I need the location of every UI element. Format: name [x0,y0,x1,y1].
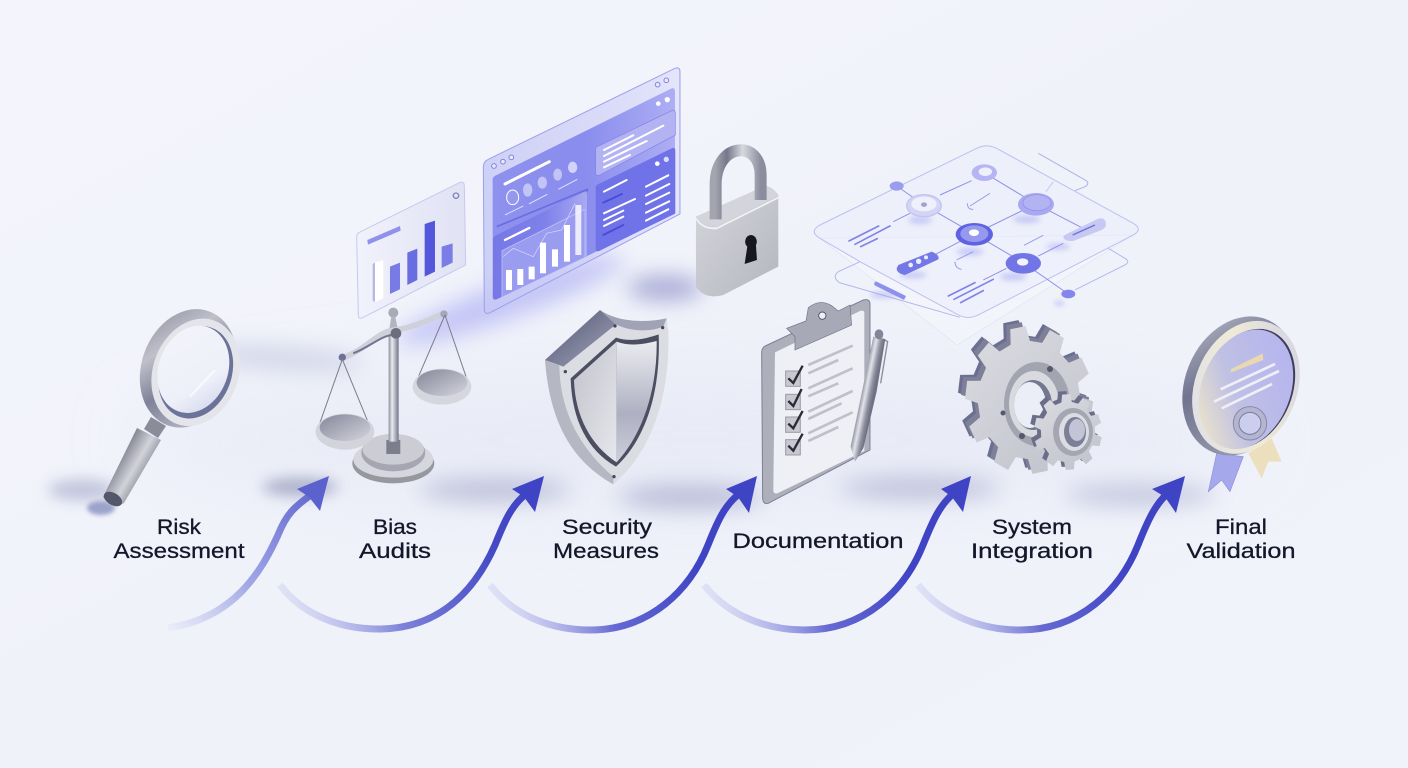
label: System Integration: System [992,516,1072,539]
label: Documentation: Documentation [732,530,904,553]
label: Final Validation: Validation [1186,540,1296,563]
large gear [950,312,1101,482]
label: Risk Assessment: Assessment [114,540,245,563]
node shadows [870,215,1070,306]
metric circles cell [497,162,587,227]
text cell bottom right [596,148,675,251]
window dots [492,78,669,168]
icon: balance scale [316,308,471,483]
panel: workflow network diagram [814,146,1138,345]
label: Security Measures: Measures [553,540,659,563]
arrow: Security Measures to Documentation [490,476,757,630]
label: System Integration: Integration [971,540,1093,563]
label: Risk Assessment: Risk [157,516,202,539]
arrow: Documentation to System Integration [704,476,971,630]
text lines [849,226,993,303]
clip [787,302,852,350]
icon: certificate medal [1162,299,1319,492]
text cell top right [596,110,675,175]
soft floor shadows [48,242,1260,510]
checklist rows [786,346,853,455]
lower sheet [820,235,1133,345]
process arrows [168,476,1185,630]
arrow: Bias Audits to Security Measures [280,476,544,629]
nodes [874,164,1106,300]
line and bar chart cell [493,192,587,300]
panel: large analytics dashboard [483,68,680,313]
label: Bias Audits: Bias [373,516,417,539]
label: Bias Audits: Audits [359,540,431,563]
icon: shield [545,310,668,484]
arrow: Risk Assessment to Bias Audits [168,476,329,628]
icon: magnifying glass [87,295,255,515]
icon: interlocking gears [950,312,1109,482]
panel: small bar chart glass card [357,182,466,318]
label: Security Measures: Security [562,516,653,539]
icon: clipboard checklist with pen [762,300,888,504]
arrow: System Integration to Final Validation [918,476,1185,630]
pen [851,337,885,462]
label: Final Validation: Final [1215,516,1267,539]
dashboard interior [493,88,675,300]
connectors [893,173,1085,294]
icon: padlock [696,150,778,296]
bars [373,221,453,302]
small gear [1023,383,1109,478]
